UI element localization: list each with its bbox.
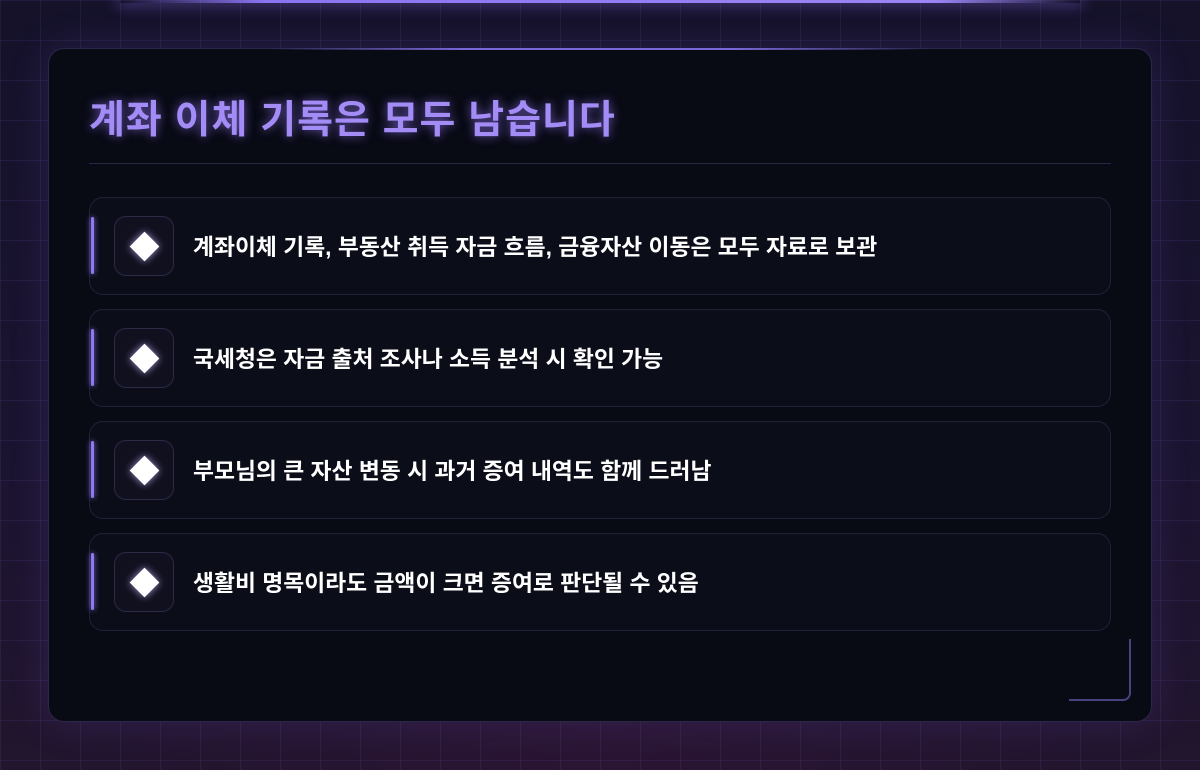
corner bracket decoration: [1069, 639, 1131, 701]
item 1: [89, 197, 1111, 295]
text 4: 생활비 명목이라도 금액이 크면 증여로 판단될 수 있음: [193, 570, 699, 596]
text 1: 계좌이체 기록, 부동산 취득 자금 흐름, 금융자산 이동은 모두 자료로 보관: [193, 234, 877, 260]
icon: diamond: [114, 328, 174, 388]
top glow line: [120, 0, 1080, 3]
icon: diamond: [114, 552, 174, 612]
icon: diamond: [114, 216, 174, 276]
title: 계좌 이체 기록은 모두 남습니다: [89, 99, 616, 142]
item 3: [89, 421, 1111, 519]
text 2: 국세청은 자금 출처 조사나 소득 분석 시 확인 가능: [193, 346, 663, 372]
item 4: [89, 533, 1111, 631]
icon: diamond: [114, 440, 174, 500]
item 2: [89, 309, 1111, 407]
text 3: 부모님의 큰 자산 변동 시 과거 증여 내역도 함께 드러남: [193, 458, 711, 484]
